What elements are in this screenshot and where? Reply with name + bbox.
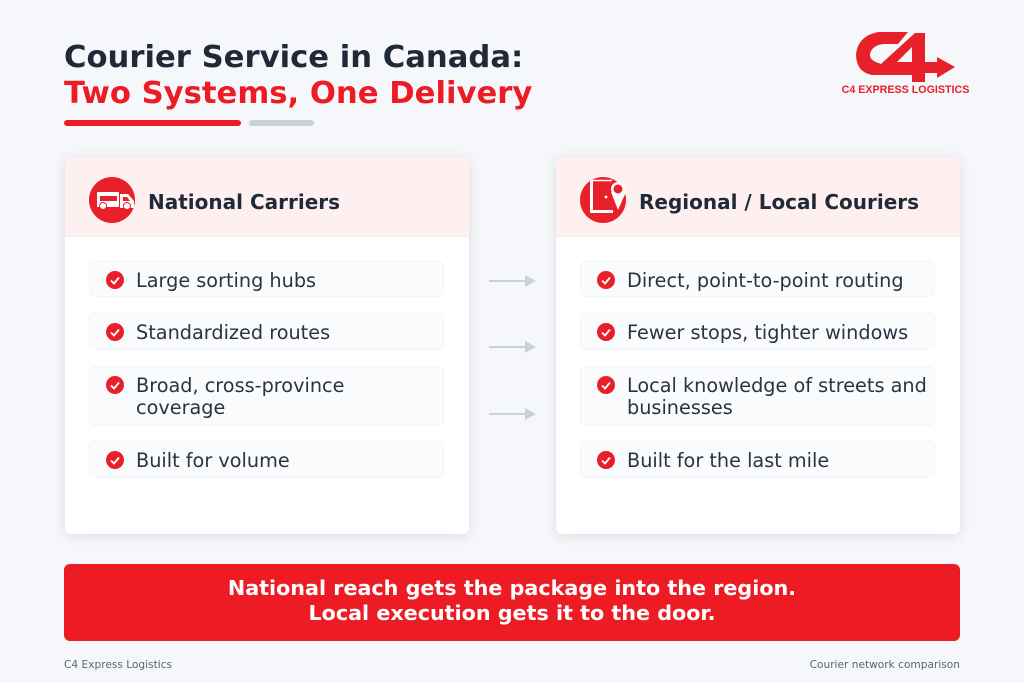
title: Two Systems, One Delivery — [64, 76, 532, 110]
panel header: national carriers — [65, 157, 469, 237]
icon: door and pin — [580, 177, 626, 223]
list item — [89, 261, 444, 297]
list item: businesses — [627, 396, 733, 419]
list item — [580, 261, 935, 297]
footer right: Courier network comparison — [810, 658, 960, 670]
list item — [89, 366, 444, 426]
title underline accent — [64, 120, 314, 126]
icon: truck — [89, 177, 135, 223]
list item: Standardized routes — [136, 321, 330, 344]
list item: Built for the last mile — [627, 449, 829, 472]
panel header: regional couriers — [556, 157, 960, 237]
footer left: C4 Express Logistics — [64, 658, 172, 670]
heading: national carriers: National Carriers — [148, 190, 340, 214]
list item: Built for volume — [136, 449, 290, 472]
panel: national carriers — [65, 157, 469, 534]
title — [64, 40, 532, 110]
list item — [89, 313, 444, 350]
callout banner: Local execution gets it to the door. — [308, 601, 716, 625]
list item — [580, 366, 935, 426]
logo — [842, 32, 969, 96]
callout banner — [64, 564, 960, 641]
callout banner: National reach gets the package into the region. — [228, 576, 796, 600]
list item: Fewer stops, tighter windows — [627, 321, 908, 344]
arrows — [489, 275, 536, 420]
panel: regional couriers — [556, 157, 960, 534]
list item: Broad, cross-province — [136, 374, 344, 397]
list item — [580, 441, 935, 478]
list item — [89, 441, 444, 478]
logo: C4 EXPRESS LOGISTICS — [842, 84, 969, 96]
list item: Large sorting hubs — [136, 269, 316, 292]
list item: Local knowledge of streets and — [627, 374, 927, 397]
list item: coverage — [136, 396, 225, 419]
title: Courier Service in Canada: — [64, 40, 523, 74]
list item — [580, 313, 935, 350]
heading: regional couriers: Regional / Local Couriers — [639, 190, 919, 214]
list item: Direct, point-to-point routing — [627, 269, 904, 292]
